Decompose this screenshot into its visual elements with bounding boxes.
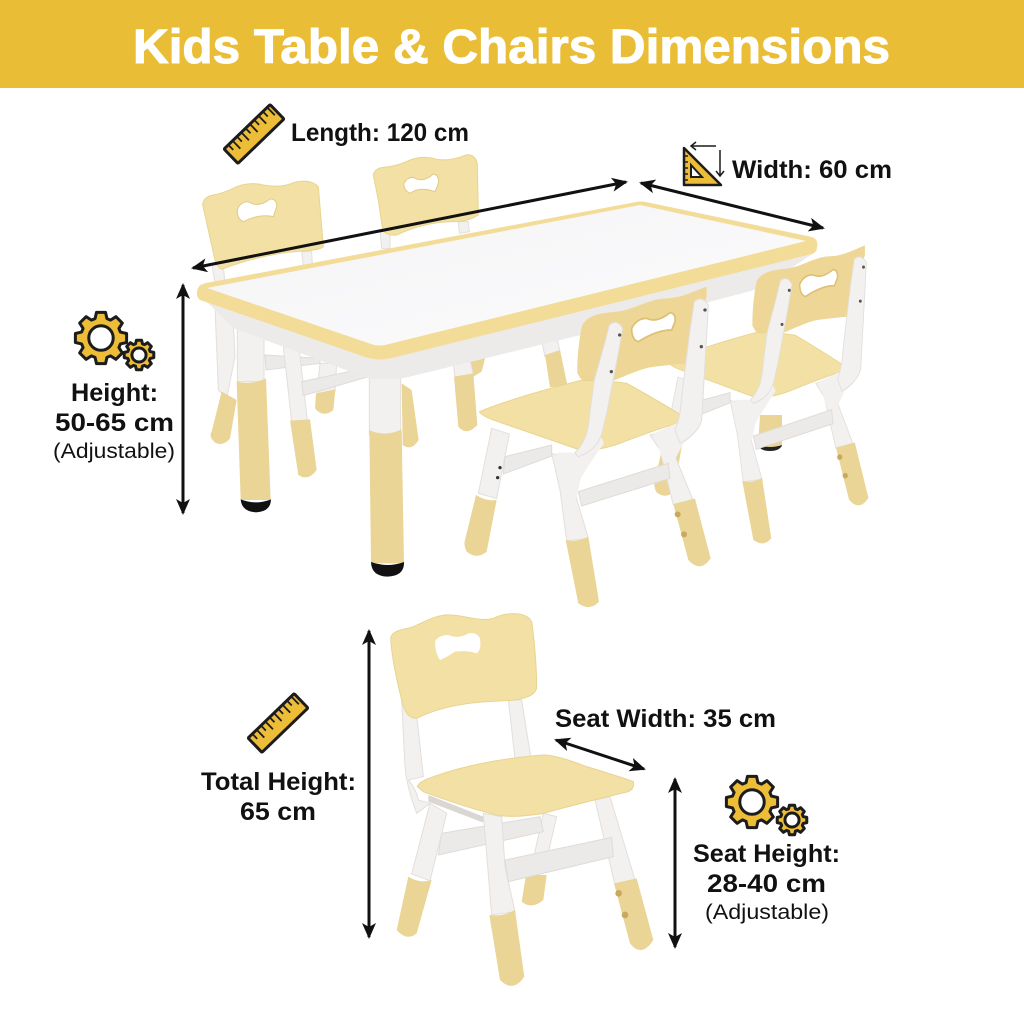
label: seat height: 28-40 cm: [707, 870, 826, 898]
chair legs: [397, 795, 653, 986]
label: table height: Height:: [71, 379, 158, 407]
label: table height: [53, 379, 175, 463]
right front chair: [654, 245, 868, 543]
label: seat width: Seat Width: 35 cm: [555, 705, 776, 733]
single chair: [391, 614, 653, 986]
left rear chair backrest: [203, 181, 323, 269]
icon: ruler (length): [224, 105, 284, 163]
chair backrest: [391, 614, 537, 718]
arrow: table height: [182, 285, 184, 513]
table apron: [205, 250, 818, 379]
arrow: chair total height: [368, 631, 370, 937]
arrow: seat height: [674, 779, 676, 947]
icon: ruler (total height): [248, 694, 308, 752]
arrow: length: [193, 182, 626, 268]
middle rear chair backrest: [373, 155, 478, 235]
label: table height: 50-65 cm: [55, 409, 174, 437]
rear-left table leg: [237, 327, 271, 512]
icon: set square (width): [684, 142, 724, 185]
label: table height: (Adjustable): [53, 440, 175, 463]
table and four chairs: [197, 155, 868, 607]
chair posts: [402, 700, 531, 813]
label: width: Width: 60 cm: [732, 156, 892, 184]
table front-right leg: [758, 415, 782, 451]
table top: [197, 202, 817, 360]
label: length: Length: 120 cm: [291, 119, 469, 147]
arrow: width: [641, 183, 823, 228]
label: total height: [201, 768, 356, 826]
title banner: [0, 0, 1024, 88]
label: seat height: (Adjustable): [705, 901, 829, 924]
icon: gears (table height): [75, 312, 154, 370]
label: seat height: [693, 840, 840, 924]
label: total height: 65 cm: [240, 798, 316, 826]
chair seat: [417, 755, 634, 816]
rear chairs and table legs: [203, 155, 567, 577]
left front chair: [464, 287, 711, 607]
title: Kids Table & Chairs Dimensions: [133, 21, 890, 74]
arrow: seat width: [556, 740, 644, 769]
label: total height: Total Height:: [201, 768, 356, 796]
icon: gears (seat height): [726, 776, 807, 835]
label: seat height: Seat Height:: [693, 840, 840, 868]
front-left table leg: [369, 373, 404, 577]
